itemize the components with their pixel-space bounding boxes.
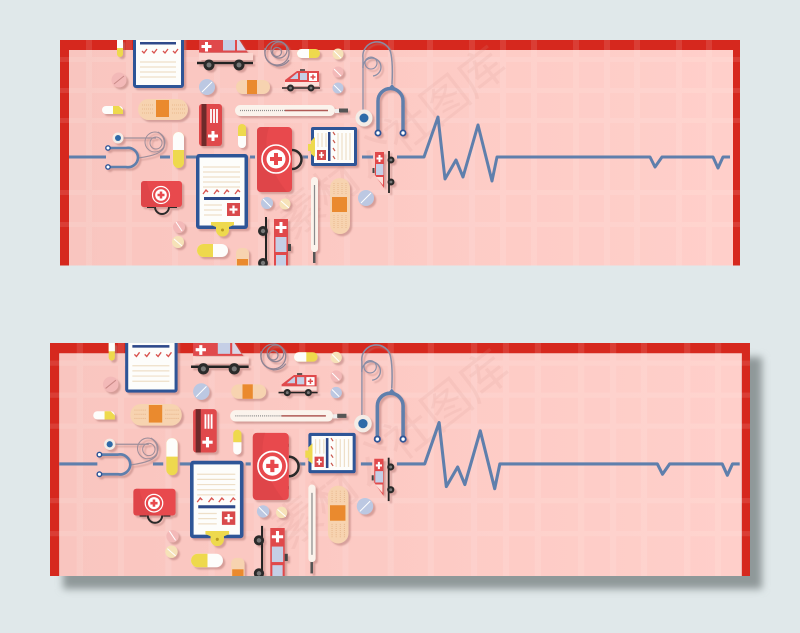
icon: bandage	[231, 384, 266, 399]
icon: small ambulance	[282, 70, 320, 92]
icon: first aid kit	[257, 127, 302, 192]
icon: clipboard with checks	[133, 30, 184, 88]
icon: first aid kit	[253, 433, 299, 500]
icon: pill	[117, 40, 123, 57]
icon: medical card	[193, 409, 217, 453]
icon: cropped ambulance	[258, 217, 291, 268]
medical icons group	[93, 333, 406, 589]
icon: pill	[233, 430, 241, 455]
pink panel fill	[69, 50, 733, 266]
icon: vertical bandage	[330, 178, 350, 234]
icon: pill	[294, 352, 318, 362]
watermark: 素材公社图库	[263, 341, 519, 558]
icon: bandage	[138, 99, 188, 120]
icon: wire coil	[261, 344, 286, 370]
icon: pill	[197, 244, 228, 257]
icon: vertical bandage	[328, 486, 349, 543]
icon: small first aid kit	[133, 489, 176, 523]
icon: cropped bandage	[231, 558, 245, 589]
icon: pill	[191, 554, 223, 567]
icon: clipboard with checks	[125, 333, 178, 393]
banner shadow	[63, 357, 762, 589]
panel: bottom banner	[50, 333, 750, 589]
icon: ambulance	[197, 35, 253, 70]
icon: pill	[102, 106, 123, 114]
icon: wire coil	[265, 41, 289, 66]
panel: top banner	[60, 30, 740, 278]
icon: clipboard sideways	[305, 433, 356, 473]
icon: small first aid kit	[141, 181, 182, 214]
pink panel fill	[59, 353, 742, 577]
icon: tablets	[103, 352, 373, 558]
icon: medical card	[199, 104, 222, 146]
icon: bandage	[130, 404, 182, 426]
icon: ambulance	[191, 338, 249, 375]
icon: large clipboard	[196, 154, 248, 237]
icon: small stethoscope	[106, 132, 165, 169]
icon: large stethoscope	[356, 42, 406, 136]
icon: small ambulance	[279, 374, 318, 396]
icon: thermometer	[230, 410, 346, 422]
icon: pill	[238, 124, 246, 148]
icon: ambulance sideways	[372, 458, 394, 501]
ECG line	[69, 117, 730, 181]
icon: large clipboard	[190, 461, 244, 546]
icon: vertical thermometer	[311, 177, 318, 263]
icon: tablets	[112, 48, 374, 248]
icon: cropped ambulance	[254, 526, 288, 579]
icon: large stethoscope	[354, 345, 406, 442]
icon: cropped bandage	[236, 248, 252, 266]
red frame	[50, 343, 750, 577]
icon: pill	[109, 343, 115, 361]
icon: pill	[93, 411, 115, 419]
icon: thermometer	[235, 105, 348, 116]
icon: small stethoscope	[97, 438, 158, 477]
icon: pill	[173, 132, 184, 168]
medical icons group	[102, 30, 406, 278]
icon: bandage	[236, 80, 270, 94]
ECG line	[59, 423, 740, 489]
icon: clipboard sideways	[308, 127, 357, 166]
watermark: 素材公社图库	[266, 37, 516, 248]
icon: ambulance sideways	[372, 151, 394, 193]
icon: pill	[297, 49, 320, 58]
icon: pill	[166, 438, 178, 475]
red frame	[60, 40, 740, 266]
icon: vertical thermometer	[308, 485, 316, 573]
